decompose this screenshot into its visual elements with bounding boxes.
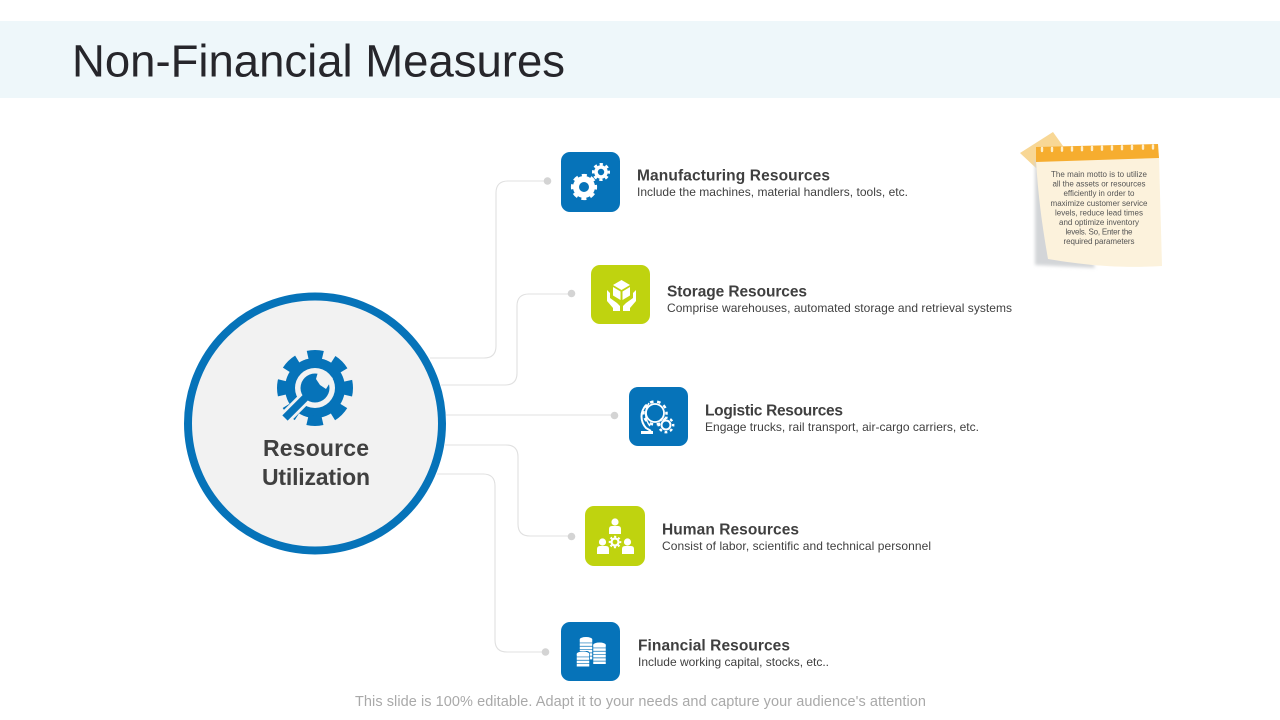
note text: all the assets or resources <box>1052 180 1146 188</box>
note text: and optimize inventory <box>1059 218 1139 227</box>
icon: gears <box>561 152 620 212</box>
description: Consist of labor, scientific and technical personnel <box>662 539 931 553</box>
note text: levels, reduce lead times <box>1055 208 1143 218</box>
icon: cube in hands <box>591 265 650 324</box>
note top strip <box>1036 144 1159 162</box>
item: Financial Resources <box>561 622 829 681</box>
description: Include working capital, stocks, etc.. <box>638 655 829 669</box>
description: Engage trucks, rail transport, air-cargo carriers, etc. <box>705 420 979 434</box>
description: Include the machines, material handlers, tools, etc. <box>637 185 908 199</box>
icon: people and gear <box>585 506 645 566</box>
header band <box>0 21 1280 98</box>
item: Human Resources <box>585 506 931 566</box>
heading: Storage Resources <box>667 284 807 300</box>
note text: The main motto is to utilize <box>1051 170 1148 179</box>
heading: Financial Resources <box>638 638 790 654</box>
heading: Logistic Resources <box>705 402 843 420</box>
heading: Manufacturing Resources <box>637 168 830 184</box>
central circle: Resource Utilization <box>188 296 442 550</box>
note shadow <box>1035 160 1095 268</box>
heading: Human Resources <box>662 522 799 538</box>
item: Manufacturing Resources <box>561 152 908 212</box>
note text: maximize customer service <box>1050 199 1148 208</box>
note tape <box>1020 132 1063 168</box>
icon: hand with gears <box>629 387 688 446</box>
note paper <box>1036 157 1162 267</box>
connectors <box>430 177 618 656</box>
icon: coin stacks <box>561 622 620 681</box>
sticky note <box>1020 132 1162 268</box>
description: Comprise warehouses, automated storage and retrieval systems <box>667 301 1012 315</box>
note text: required parameters <box>1064 237 1134 246</box>
item: Logistic Resources <box>629 387 979 446</box>
central label: Utilization <box>262 464 370 490</box>
note text: efficiently in order to <box>1064 189 1135 198</box>
note text: levels. So, Enter the <box>1066 228 1133 236</box>
footer note: This slide is 100% editable. Adapt it to your needs and capture your audience's attention <box>355 694 926 710</box>
note text <box>1050 170 1148 246</box>
icon: gear with wrench <box>280 355 348 423</box>
central label: Resource <box>263 435 369 461</box>
title: Non-Financial Measures <box>72 36 565 86</box>
central label <box>262 435 370 490</box>
item: Storage Resources <box>591 265 1012 324</box>
